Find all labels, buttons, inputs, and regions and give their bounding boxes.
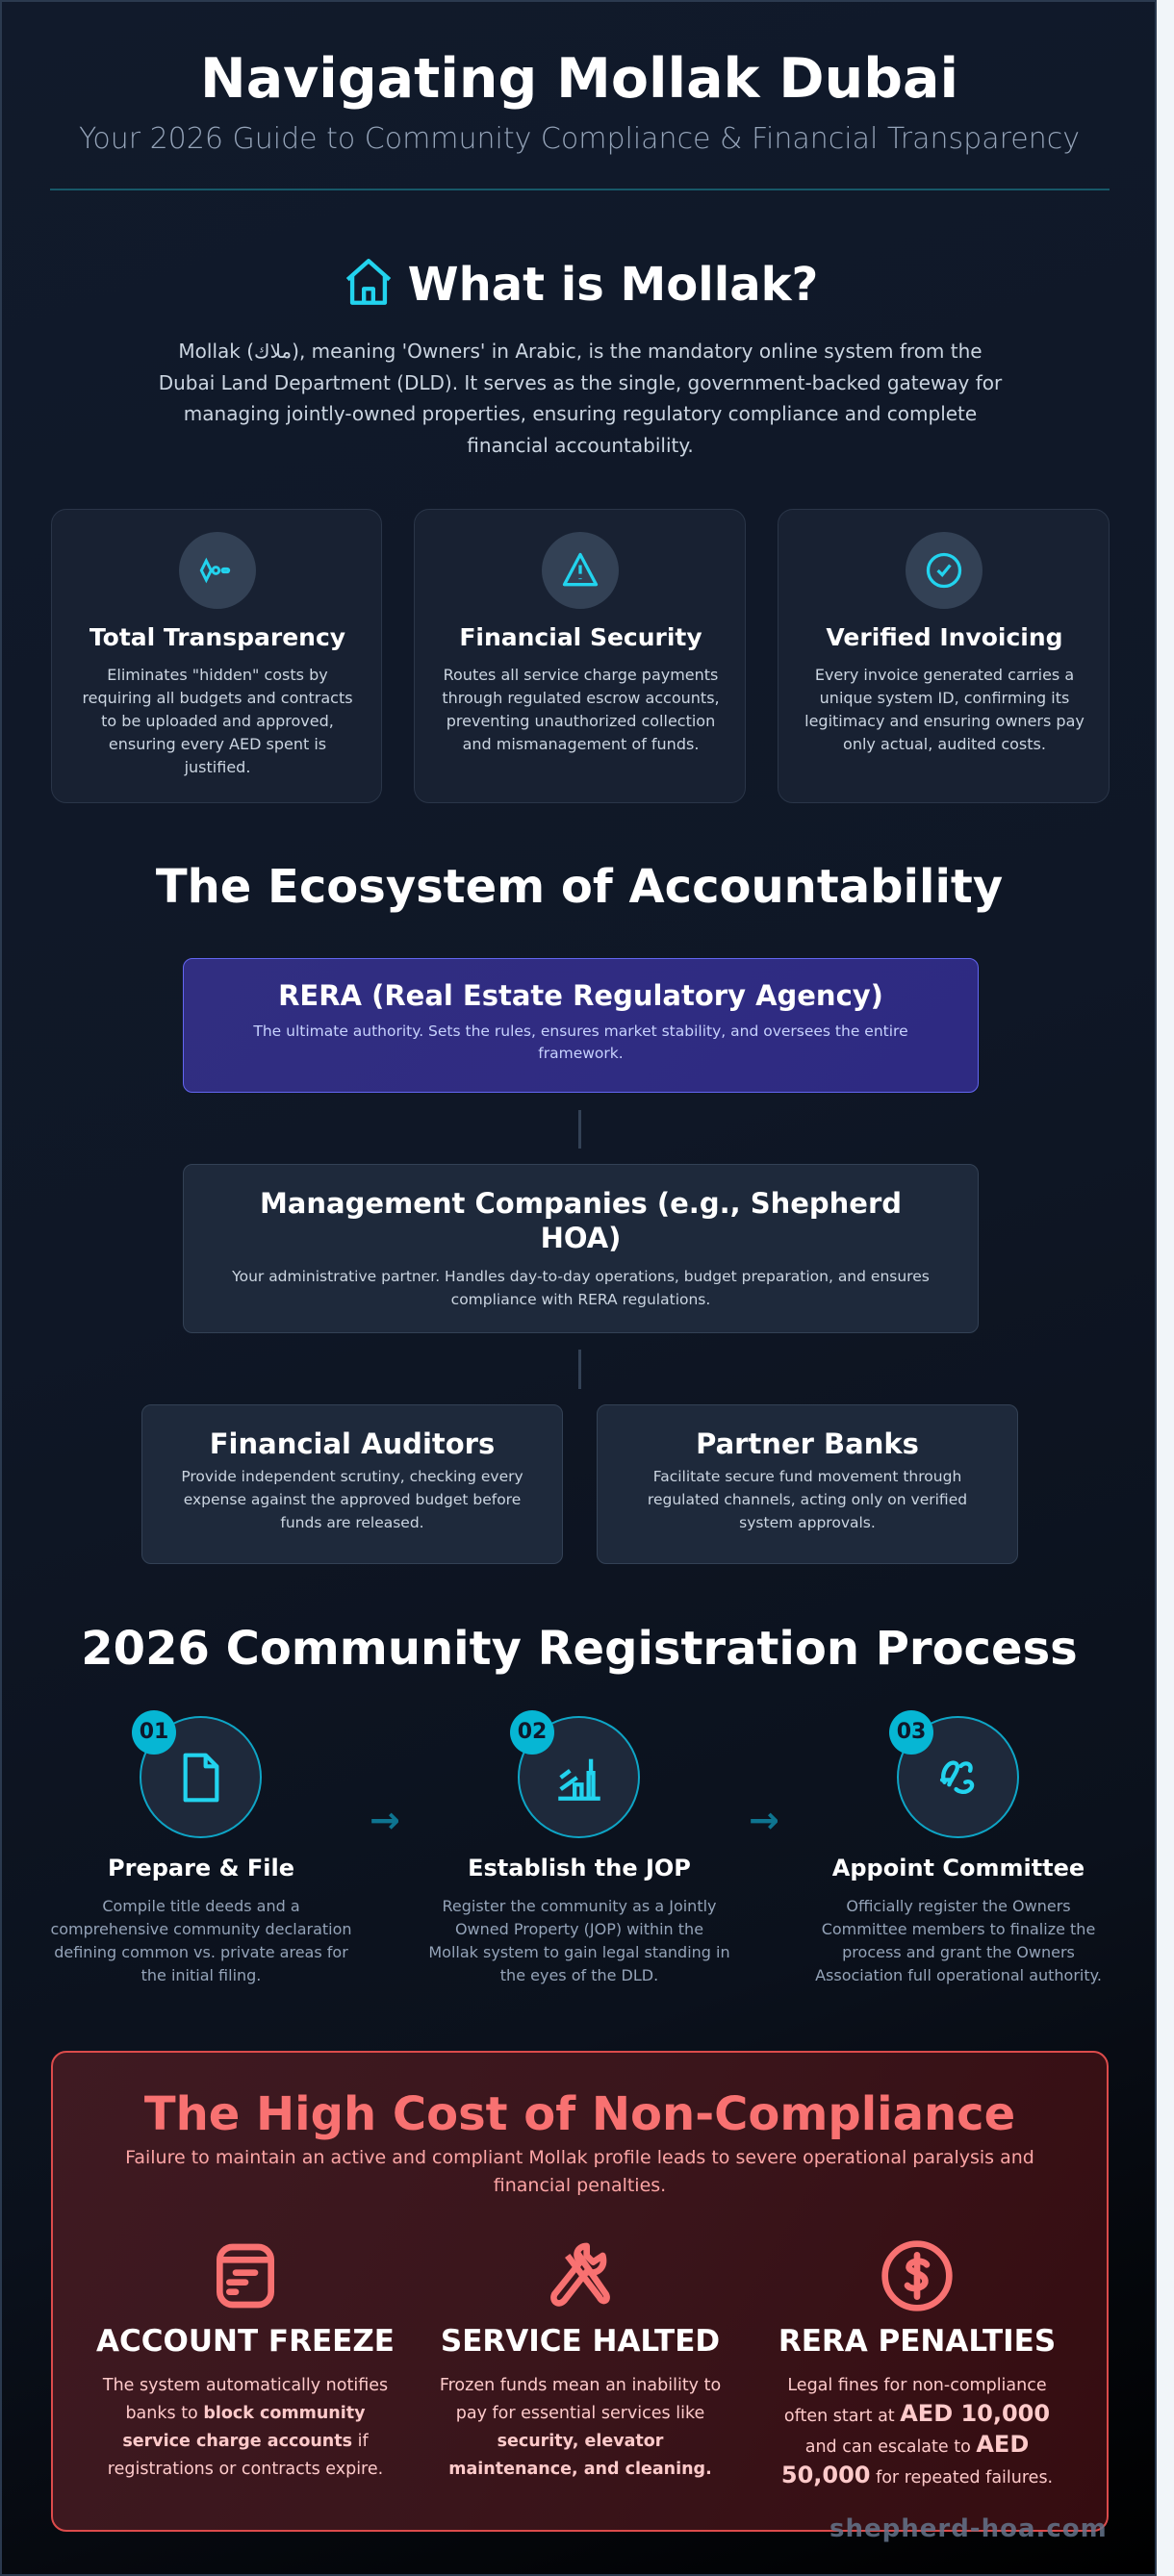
step 3: Committee members to finalize the — [822, 1920, 1095, 1938]
heading: what is mollak: What is Mollak? — [408, 258, 818, 312]
box: partner banks: Facilitate secure fund movement through regulated channels, acting only on verified system approvals. — [648, 1468, 967, 1531]
icon: frozen card — [217, 2243, 274, 2309]
item: account freeze — [96, 2243, 395, 2479]
panel: verified invoicing: Every invoice generated carries a unique system ID, confirming its legitimacy and ensuring owners pay only actual, audited costs. — [804, 666, 1085, 753]
box: financial auditors — [141, 1404, 563, 1564]
panel: high cost of non-compliance — [51, 2051, 1109, 2532]
step 1: 01 — [140, 1720, 168, 1744]
step 2: 02 — [518, 1720, 547, 1744]
step 3: process and grant the Owners — [842, 1943, 1075, 1961]
panel: total transparency: Total Transparency — [89, 623, 345, 651]
watermark: shepherd-hoa.com — [829, 2514, 1108, 2543]
subtitle: Your 2026 Guide to Community Compliance & Financial Transparency — [79, 122, 1080, 156]
item: service halted — [440, 2243, 721, 2479]
item: account freeze: ACCOUNT FREEZE — [96, 2324, 395, 2359]
icon: house — [346, 259, 391, 305]
box: partner banks — [597, 1404, 1018, 1564]
icon: tools — [550, 2243, 610, 2307]
box: RERA: The ultimate authority. Sets the rules, ensures market stability, and oversees the entire framework. — [253, 1023, 908, 1062]
icon: chart — [518, 1716, 640, 1838]
red subtitle: Failure to maintain an active and compliant Mollak profile leads to severe operational paralysis and financial penalties. — [125, 2147, 1034, 2196]
step 3: Appoint Committee — [832, 1855, 1085, 1881]
step 1: comprehensive community declaration — [50, 1920, 352, 1938]
step 1 — [50, 1710, 352, 1984]
box: RERA: RERA (Real Estate Regulatory Agency) — [278, 979, 883, 1012]
panel: financial security — [414, 509, 746, 803]
icon: committee — [897, 1716, 1019, 1838]
step 2 — [428, 1710, 730, 1984]
box: financial auditors: Financial Auditors — [210, 1427, 495, 1460]
heading: ecosystem: The Ecosystem of Accountability — [156, 860, 1003, 914]
step 2: the eyes of the DLD. — [500, 1966, 658, 1984]
intro paragraph: Mollak (ملاك), meaning 'Owners' in Arabic, is the mandatory online system from the Dubai Land Department (DLD). It serves as the single, government-backed gateway for managing jointly-owned properties, ensuring regulatory compliance and complete financial accountability. — [159, 340, 1002, 457]
title: Navigating Mollak Dubai — [200, 47, 958, 111]
panel: verified invoicing — [778, 509, 1110, 803]
item: rera penalties: RERA PENALTIES — [778, 2324, 1056, 2359]
red title: The High Cost of Non-Compliance — [144, 2087, 1015, 2141]
box: management companies: Your administrative partner. Handles day-to-day operations, budget preparation, and ensures compliance with RERA regulations. — [232, 1268, 930, 1308]
step 2: Register the community as a Jointly — [442, 1897, 716, 1915]
step 3: Association full operational authority. — [815, 1966, 1102, 1984]
icon: key — [179, 532, 256, 609]
step 1: Prepare & File — [108, 1855, 294, 1881]
step 3 — [815, 1710, 1102, 1984]
icon: dollar — [881, 2240, 953, 2311]
panel: verified invoicing: Verified Invoicing — [826, 623, 1063, 651]
item: account freeze: The system automatically notifies banks to block community service charge accounts if registrations or contracts expire. — [103, 2376, 388, 2479]
panel: financial security: Routes all service charge payments through regulated escrow accounts, preventing unauthorized collection and mismanagement of funds. — [442, 666, 720, 753]
box: management companies — [183, 1164, 979, 1333]
step 1: defining common vs. private areas for — [54, 1943, 348, 1961]
item: service halted: SERVICE HALTED — [441, 2324, 720, 2359]
item: rera penalties: Legal fines for non-compliance often start at AED 10,000 and can escalate to AED 50,000 for repeated failures. — [781, 2376, 1053, 2488]
panel: financial security: Financial Security — [459, 623, 702, 651]
step 1: the initial filing. — [141, 1966, 261, 1984]
step 3: 03 — [897, 1720, 926, 1744]
step 2: Mollak system to gain legal standing in — [428, 1943, 730, 1961]
arrow 2: → — [749, 1799, 779, 1841]
panel: total transparency — [51, 509, 382, 803]
icon: check circle — [906, 532, 983, 609]
box: financial auditors: Provide independent scrutiny, checking every expense against the approved budget before funds are released. — [181, 1468, 523, 1531]
step 2: Establish the JOP — [468, 1855, 691, 1881]
icon: warning — [542, 532, 619, 609]
panel: total transparency: Eliminates "hidden" costs by requiring all budgets and contracts to be uploaded and approved, ensuring every AED spent is justified. — [82, 666, 353, 776]
item: rera penalties — [778, 2240, 1056, 2488]
box: partner banks: Partner Banks — [696, 1427, 919, 1460]
box: RERA — [183, 958, 979, 1093]
item: service halted: Frozen funds mean an inability to pay for essential services like security, elevator maintenance, and cleaning. — [440, 2376, 721, 2479]
step 1: Compile title deeds and a — [102, 1897, 300, 1915]
box: management companies: Management Companies (e.g., Shepherd HOA) — [260, 1187, 902, 1254]
icon: document — [140, 1716, 262, 1838]
step 3: Officially register the Owners — [846, 1897, 1071, 1915]
step 2: Owned Property (JOP) within the — [455, 1920, 703, 1938]
heading: registration process: 2026 Community Registration Process — [81, 1622, 1078, 1676]
arrow 1: → — [370, 1799, 400, 1841]
